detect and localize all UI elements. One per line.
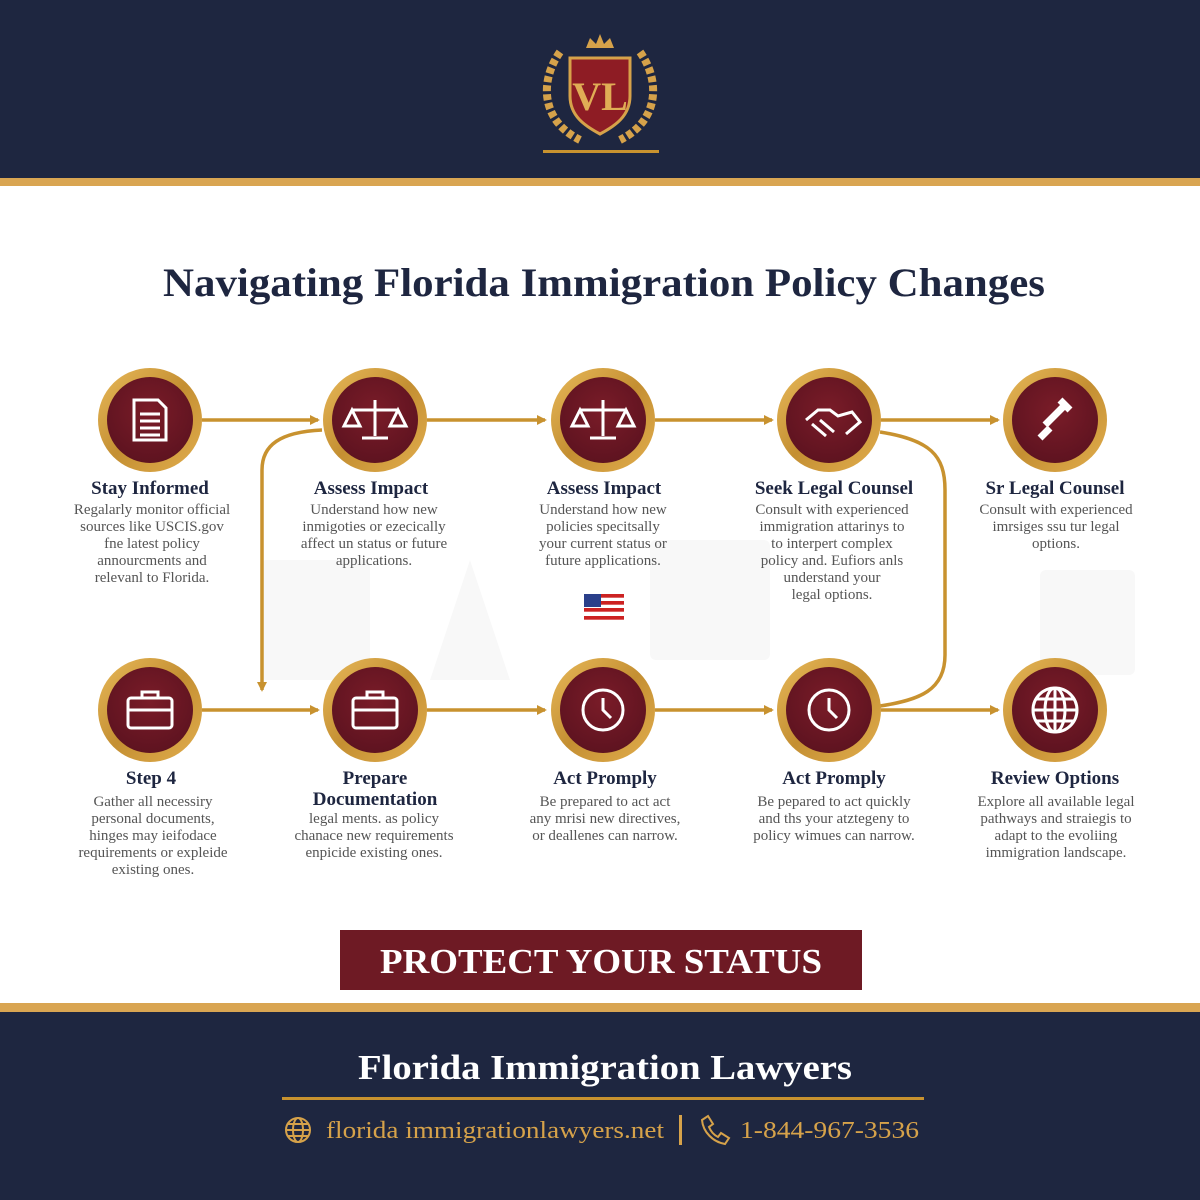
step texts row 1: legal options. (792, 587, 872, 603)
step texts row 2: Act Promply (553, 768, 657, 789)
step texts row 1: affect un status or future (301, 536, 448, 552)
step texts row 1: relevanl to Florida. (95, 570, 209, 586)
step texts row 2: enpicide existing ones. (305, 845, 443, 861)
step texts row 1: Consult with experienced (979, 502, 1133, 518)
step texts row 2: Gather all necessiry (93, 794, 213, 810)
step texts row 1: Assess Impact (314, 478, 429, 499)
step texts row 2: chanace new requirements (294, 828, 454, 844)
step texts row 2: Be prepared to act act (540, 794, 671, 810)
step texts row 1: Regalarly monitor official (74, 502, 230, 518)
title: Navigating Florida Immigration Policy Changes (163, 260, 1045, 305)
step texts row 1: Understand how new (539, 502, 667, 518)
step texts row 1: policy and. Eufiors anls (761, 553, 903, 569)
step texts row 1: Assess Impact (547, 478, 662, 499)
logo (543, 34, 659, 153)
step texts row 2: Documentation (313, 789, 438, 810)
icons (128, 400, 1077, 732)
step texts row 2: immigration landscape. (986, 845, 1126, 861)
step texts row 2: Prepare (343, 768, 407, 789)
step texts row 2: Act Promply (782, 768, 886, 789)
CTA button: PROTECT YOUR STATUS (380, 942, 822, 981)
step texts row 1 (74, 478, 1133, 603)
footer (0, 1003, 1200, 1200)
footer: florida immigrationlawyers.net (326, 1118, 664, 1144)
step texts row 1: imrsiges ssu tur legal (992, 519, 1120, 535)
step texts row 1: sources like USCIS.gov (80, 519, 224, 535)
step texts row 2: Be pepared to act quickly (757, 794, 911, 810)
step texts row 1: immigration attarinys to (760, 519, 904, 535)
step texts row 2: existing ones. (112, 862, 194, 878)
arrows (202, 420, 998, 710)
CTA button (340, 930, 862, 990)
step texts row 2: or deallenes can narrow. (532, 828, 678, 844)
step texts row 2: hinges may ieifodace (89, 828, 217, 844)
step texts row 2 (78, 768, 1135, 878)
flag (584, 594, 624, 620)
step texts row 1: Sr Legal Counsel (985, 478, 1125, 499)
step texts row 1: Seek Legal Counsel (755, 478, 913, 499)
step texts row 1: Consult with experienced (755, 502, 909, 518)
step texts row 2: adapt to the evoliing (995, 828, 1118, 844)
step texts row 1: Understand how new (310, 502, 438, 518)
step texts row 2: and ths your atztegeny to (759, 811, 909, 827)
step texts row 1: inmigoties or ezecically (302, 519, 446, 535)
step texts row 2: personal documents, (91, 811, 215, 827)
logo: VL (572, 74, 628, 119)
step texts row 1: policies specitsally (546, 519, 660, 535)
step texts row 2: Review Options (991, 768, 1119, 789)
step texts row 1: applications. (336, 553, 412, 569)
step texts row 1: your current status or (539, 536, 667, 552)
step texts row 2: pathways and straiegis to (980, 811, 1132, 827)
step texts row 1: fne latest policy (104, 536, 200, 552)
step texts row 2: Step 4 (126, 768, 177, 789)
footer: 1-844-967-3536 (740, 1118, 919, 1144)
step texts row 2: legal ments. as policy (309, 811, 439, 827)
step texts row 2: requirements or expleide (78, 845, 228, 861)
step circles (98, 368, 1107, 762)
watermark background (260, 540, 1135, 680)
header band (0, 0, 1200, 186)
step texts row 2: Explore all available legal (977, 794, 1135, 810)
step texts row 1: to interpert complex (771, 536, 893, 552)
step texts row 1: options. (1032, 536, 1080, 552)
step texts row 1: Stay Informed (91, 478, 209, 499)
footer: Florida Immigration Lawyers (358, 1048, 852, 1087)
step texts row 2: any mrisi new directives, (530, 811, 680, 827)
step texts row 1: understand your (783, 570, 881, 586)
step texts row 1: future applications. (545, 553, 661, 569)
step texts row 2: policy wimues can narrow. (753, 828, 915, 844)
step texts row 1: annourcments and (97, 553, 207, 569)
